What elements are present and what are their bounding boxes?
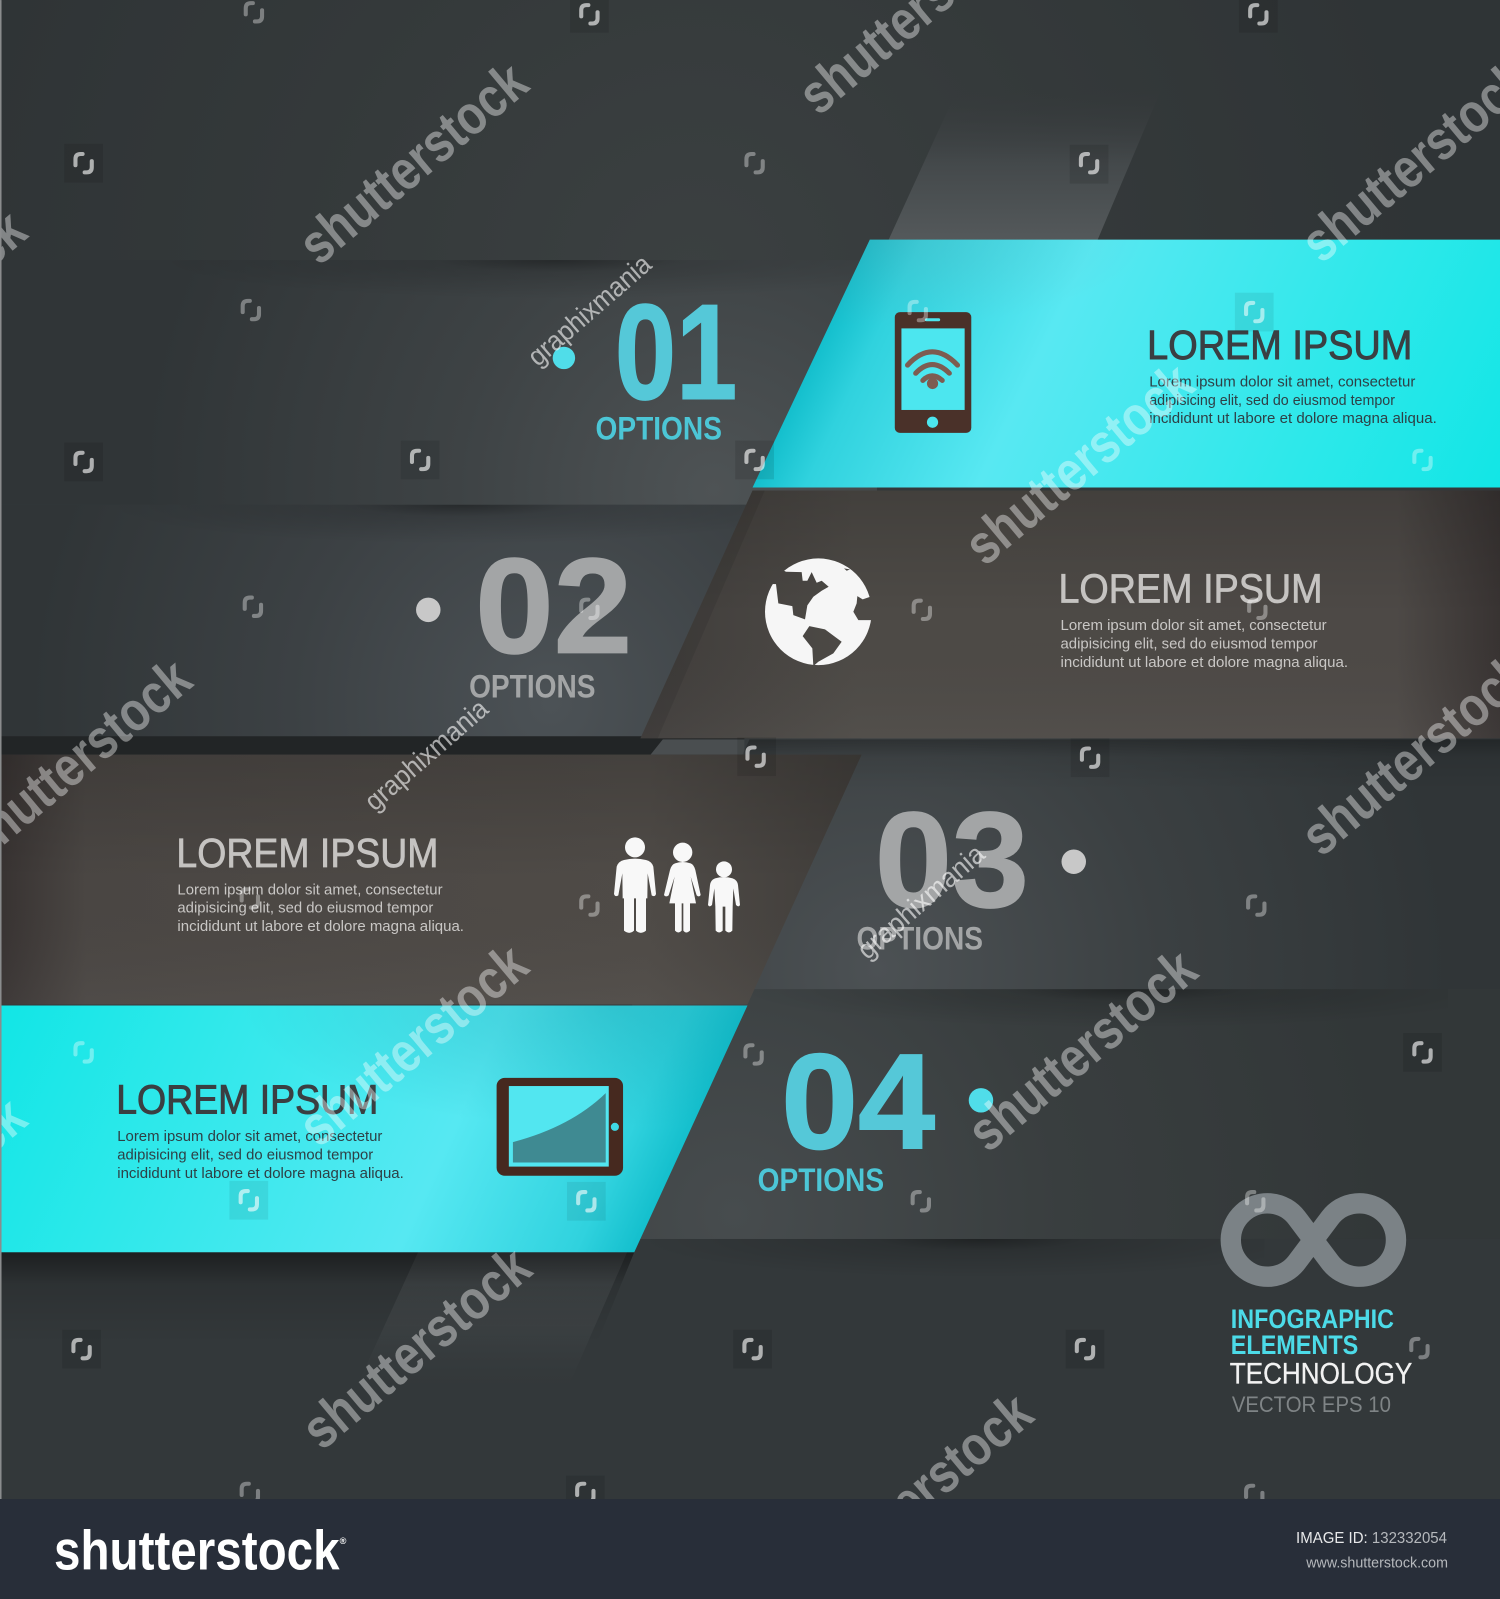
background: row 02 — [0, 505, 775, 739]
text block: option 02: adipisicing elit, sed do eiusmod tempor — [1061, 637, 1318, 653]
number block: 02 options: OPTIONS — [469, 668, 596, 705]
footer logo: shutterstock — [54, 1518, 340, 1581]
background: small light strip behind gap — [651, 739, 863, 755]
heading: option 03: LOREM IPSUM — [176, 830, 438, 876]
text block: option 04 — [117, 1129, 404, 1182]
icon: infinity symbol — [1231, 1203, 1396, 1277]
panel: option 01 band — [753, 240, 1500, 487]
watermark: shutterstock repeated: shutterstock — [289, 1234, 543, 1461]
heading: option 02: LOREM IPSUM — [1058, 566, 1323, 612]
heading: option 04: LOREM IPSUM — [116, 1077, 378, 1123]
icon: globe — [765, 558, 872, 665]
watermark: shutterstock repeated: shutterstock — [791, 1380, 1044, 1599]
background: lighter diagonal strip below last band — [352, 1252, 627, 1397]
title block: infographic elements technology: TECHNOLOGY — [1230, 1357, 1413, 1390]
watermark: shutterstock repeated: shutterstock — [955, 936, 1209, 1163]
number block: 03 options: OPTIONS — [857, 919, 983, 956]
background: dark gap under row 02 — [0, 736, 862, 755]
text block: option 01 — [1149, 375, 1437, 427]
watermark: graphixmania repeated: graphixmania — [521, 248, 658, 372]
footer logo: ® — [340, 1536, 347, 1546]
footer bar — [0, 1499, 1500, 1599]
text block: option 03: incididunt ut labore et dolore magna aliqua. — [177, 919, 464, 935]
title block: infographic elements technology: VECTOR EPS 10 — [1232, 1392, 1391, 1417]
footer image id: IMAGE ID: 132332054 — [1296, 1530, 1447, 1547]
text block: option 04: Lorem ipsum dolor sit amet, consectetur — [117, 1129, 382, 1145]
text block: option 01: adipisicing elit, sed do eiusmod tempor — [1149, 393, 1395, 409]
heading: option 01: LOREM IPSUM — [1147, 322, 1412, 368]
icon: tablet with chart — [497, 1078, 623, 1176]
title block: infographic elements technology: ELEMENTS — [1231, 1330, 1358, 1360]
number block: 02 options — [416, 530, 632, 705]
left edge line — [0, 0, 2, 1499]
title block: infographic elements technology: INFOGRAPHIC — [1231, 1304, 1394, 1334]
background: shadows at row tops — [0, 260, 1500, 1344]
background: top section — [0, 0, 1500, 261]
text block: option 03: adipisicing elit, sed do eiusmod tempor — [177, 901, 433, 917]
text block: option 04: adipisicing elit, sed do eiusmod tempor — [117, 1147, 373, 1163]
text block: option 01: incididunt ut labore et dolore magna aliqua. — [1149, 411, 1437, 427]
watermark: graphixmania repeated: graphixmania — [358, 692, 494, 816]
text block: option 04: incididunt ut labore et dolore magna aliqua. — [117, 1166, 404, 1182]
panel: option 03 band — [0, 755, 862, 1004]
watermark: shutterstock repeated: shutterstock — [286, 49, 540, 276]
background: row 01 — [0, 260, 877, 505]
background: lighter diagonal strip above first band — [888, 87, 1162, 241]
watermark: pale icon squares on bright band — [229, 293, 1274, 1221]
number block: 04 options: OPTIONS — [758, 1161, 884, 1198]
background: row 03 — [744, 738, 1500, 990]
number block: 01 options — [553, 276, 737, 447]
icon: family of three — [614, 837, 740, 933]
text block: option 03: Lorem ipsum dolor sit amet, consectetur — [177, 882, 443, 898]
number block: 04 options: 04 — [781, 1025, 935, 1177]
text block: option 02: incididunt ut labore et dolore magna aliqua. — [1061, 655, 1348, 671]
text block: option 02 — [1061, 618, 1348, 671]
background: row 04 — [632, 989, 1500, 1240]
number block: 03 options — [857, 784, 1086, 956]
number block: 03 options: 03 — [875, 784, 1029, 936]
watermark: shutterstock repeated: shutterstock — [952, 350, 1206, 577]
number block: 04 options — [758, 1025, 993, 1198]
text block: option 03 — [177, 882, 464, 935]
watermark: graphixmania repeated: graphixmania — [851, 837, 991, 965]
watermark: graphixmania repeated — [358, 248, 991, 965]
icon: smartphone with wifi — [895, 312, 971, 433]
background: bottom section — [0, 1239, 1500, 1500]
number block: 02 options: 02 — [475, 530, 632, 682]
number block: 01 options: OPTIONS — [596, 410, 722, 447]
title block: infographic elements technology — [1230, 1304, 1413, 1417]
panel: option 04 band — [0, 1005, 747, 1252]
panel: option 02 band — [640, 491, 1500, 738]
number block: 01 options: 01 — [615, 276, 737, 428]
watermark: shutterstock repeated: shutterstock — [286, 931, 540, 1158]
footer url: www.shutterstock.com — [1305, 1555, 1448, 1571]
text block: option 02: Lorem ipsum dolor sit amet, consectetur — [1061, 618, 1327, 634]
text block: option 01: Lorem ipsum dolor sit amet, consectetur — [1149, 375, 1415, 391]
